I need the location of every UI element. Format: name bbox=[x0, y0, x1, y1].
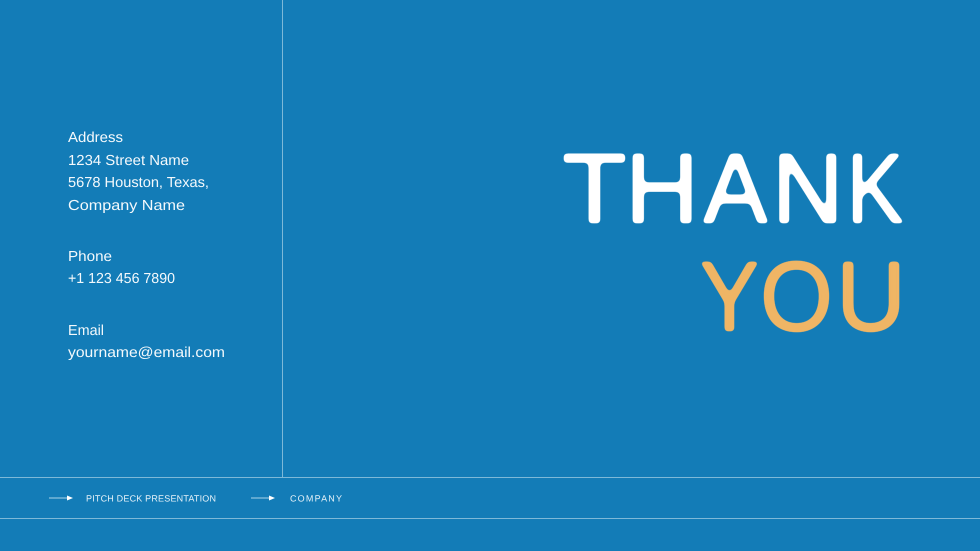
heading word: you: O bbox=[760, 240, 833, 352]
address block bbox=[68, 130, 209, 214]
address block: Address bbox=[68, 130, 123, 146]
address block: 5678 Houston, Texas, bbox=[68, 175, 209, 191]
heading: thank you bbox=[562, 132, 906, 352]
email block: yourname@email.com bbox=[68, 345, 225, 361]
phone block bbox=[68, 249, 175, 287]
heading word: thank: H bbox=[625, 132, 699, 244]
heading word: thank: N bbox=[772, 132, 844, 244]
footer bar bbox=[49, 493, 342, 503]
phone block: +1 123 456 7890 bbox=[68, 271, 175, 287]
email block bbox=[68, 323, 225, 361]
icon: arrow one bbox=[49, 496, 73, 500]
footer label: company: COMPANY bbox=[290, 493, 342, 503]
phone block: Phone bbox=[68, 249, 112, 265]
contact details panel bbox=[68, 130, 225, 361]
footer label: pitch deck presentation: PITCH DECK PRESENTATION bbox=[86, 493, 216, 503]
heading word: thank: K bbox=[846, 132, 904, 244]
heading word: thank bbox=[562, 132, 904, 244]
address block: Company Name bbox=[68, 198, 185, 214]
heading word: you bbox=[700, 240, 906, 352]
icon: arrow two bbox=[251, 496, 275, 500]
heading word: you: Y bbox=[700, 240, 759, 352]
heading word: you: U bbox=[836, 240, 906, 352]
email block: Email bbox=[68, 323, 104, 339]
heading word: thank: A bbox=[703, 132, 768, 244]
heading word: thank: T bbox=[562, 132, 627, 244]
address block: 1234 Street Name bbox=[68, 153, 189, 169]
